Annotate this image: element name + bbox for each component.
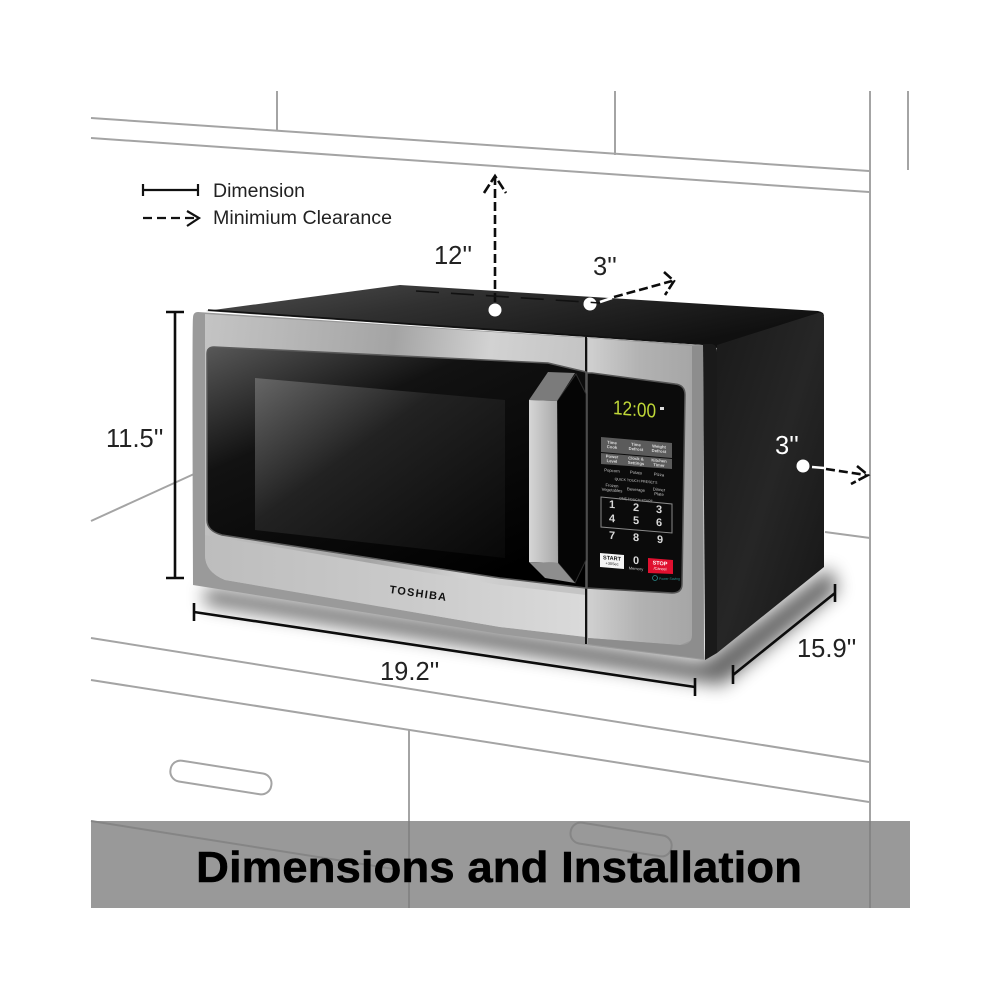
rear clearance 3 inches xyxy=(584,253,674,310)
number keys: 6 xyxy=(656,517,662,529)
number keys: 5 xyxy=(633,515,639,527)
title band: Dimensions and Installation xyxy=(196,843,802,892)
handle black grip xyxy=(557,374,586,583)
grey function buttons: Timer xyxy=(653,462,665,468)
preset labels: Popcorn xyxy=(604,467,620,474)
window frame xyxy=(207,347,586,588)
height dimension 11.5 inches: 11.5'' xyxy=(106,425,163,453)
brand name: TOSHIBA xyxy=(389,584,448,604)
grey function buttons: Power xyxy=(606,453,618,460)
handle lower bevel xyxy=(529,562,575,583)
display indicator xyxy=(660,407,664,410)
preset labels: ONE TOUCH START xyxy=(619,497,654,504)
memory label: Memory xyxy=(629,565,643,572)
stop button: STOP xyxy=(653,560,668,568)
door split line xyxy=(585,337,587,644)
number keys: 2 xyxy=(633,502,639,514)
inner window xyxy=(255,378,505,558)
stop button xyxy=(648,558,673,574)
number keys xyxy=(609,499,663,567)
preset labels: Potato xyxy=(630,469,643,476)
preset labels: QUICK TOUCH PRESETS xyxy=(615,477,658,485)
number keys: 0 xyxy=(633,555,639,567)
door handle xyxy=(529,372,586,583)
top clearance 12 inches xyxy=(434,176,506,316)
start button xyxy=(600,553,624,569)
preset labels xyxy=(602,467,666,504)
grey function buttons: Clock & xyxy=(628,455,644,462)
side clearance 3 inches xyxy=(775,432,868,484)
start button: +30Sec xyxy=(606,561,619,567)
grey function buttons: Defrost xyxy=(652,448,667,454)
grey function buttons: Time xyxy=(631,442,641,447)
start button: START xyxy=(603,555,622,563)
width dimension 19.2 inches xyxy=(194,603,695,696)
depth dimension 15.9 inches xyxy=(733,584,856,684)
number keys: 7 xyxy=(609,530,615,542)
height dimension 11.5 inches xyxy=(106,312,184,578)
microwave xyxy=(192,285,824,660)
title band xyxy=(91,821,910,908)
eco mode mark: Power Saving xyxy=(659,577,680,581)
handle upper bevel xyxy=(529,372,575,401)
legend: Minimium Clearance xyxy=(213,208,392,229)
black rim xyxy=(703,344,717,660)
top surface xyxy=(206,285,824,348)
stop button: /Cancel xyxy=(654,566,667,572)
control panel steel xyxy=(588,338,692,645)
preset labels: Beverage xyxy=(627,486,646,493)
number keys: 1 xyxy=(609,499,615,511)
grey function buttons: Cook xyxy=(607,444,618,450)
top vent dashes xyxy=(416,291,600,303)
front top seam xyxy=(208,310,703,344)
front body xyxy=(192,312,704,660)
depth dimension 15.9 inches: 15.9'' xyxy=(797,635,856,663)
grey function buttons xyxy=(601,437,672,469)
one touch start box xyxy=(601,497,672,533)
rear clearance 3 inches: 3'' xyxy=(593,253,617,281)
side panel xyxy=(717,313,824,653)
lower door steel xyxy=(205,535,586,637)
preset labels: Pizza xyxy=(654,472,665,478)
control panel xyxy=(587,373,685,593)
side clearance 3 inches: 3'' xyxy=(775,432,799,460)
eco mode mark xyxy=(652,576,680,581)
number keys: 3 xyxy=(656,504,662,516)
legend: Dimension xyxy=(213,181,305,202)
width dimension 19.2 inches: 19.2'' xyxy=(380,658,439,686)
top clearance 12 inches: 12'' xyxy=(434,242,472,270)
grey function buttons: Time xyxy=(607,440,617,445)
preset labels: Vegetables xyxy=(602,487,622,493)
grey function buttons: Settings xyxy=(628,460,645,466)
grey function buttons: Kitchen xyxy=(651,457,667,464)
background kitchen cabinets xyxy=(91,91,908,908)
microwave shadow xyxy=(205,568,838,685)
clock display: 12:00 xyxy=(613,397,656,423)
door steel xyxy=(205,314,586,637)
number keys: 8 xyxy=(633,532,639,544)
grey function buttons: Defrost xyxy=(629,446,644,452)
grey function buttons: Weight xyxy=(652,443,666,450)
preset labels: Dinner xyxy=(653,486,665,493)
handle silver face xyxy=(529,400,558,563)
number keys: 4 xyxy=(609,513,616,525)
grey function buttons: Level xyxy=(607,458,617,464)
legend xyxy=(143,181,392,229)
number keys: 9 xyxy=(657,534,663,546)
preset labels: Frozen xyxy=(605,482,619,489)
preset labels: Plate xyxy=(654,491,664,497)
